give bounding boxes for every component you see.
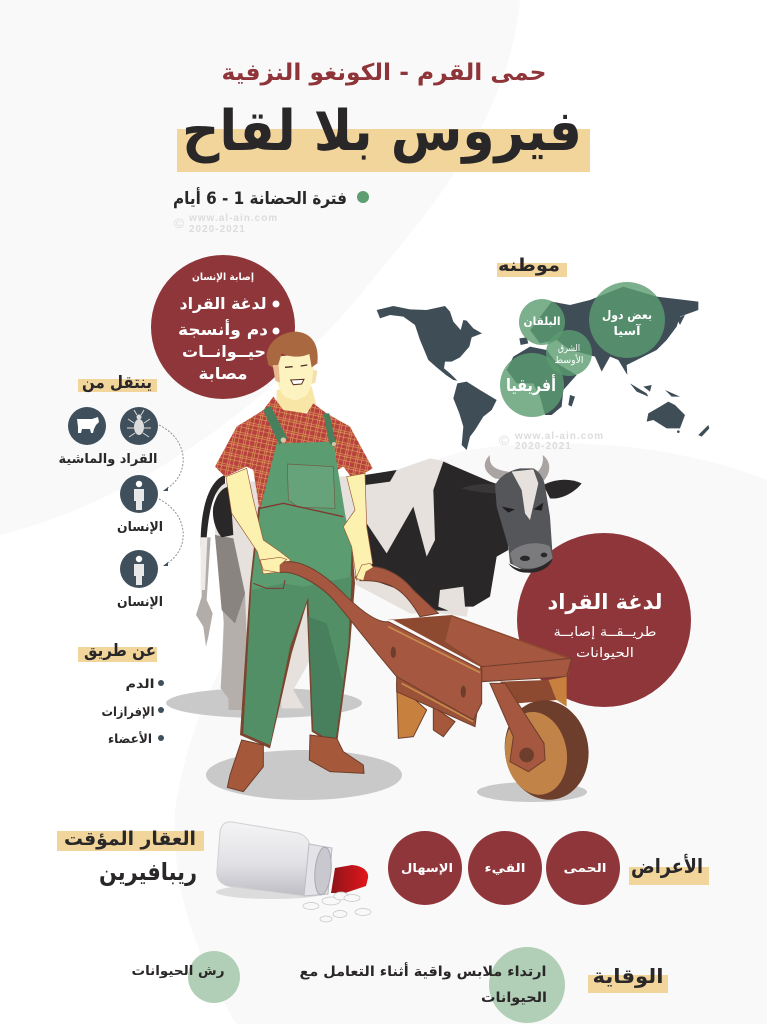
icon: cow [68, 407, 106, 445]
heading: temporary drug: العقار المؤقت [64, 828, 196, 850]
list: routes: الدم [126, 676, 154, 692]
prevention text: clothing: ارتداء ملابس واقية أثناء التعامل مع [300, 962, 546, 980]
circle: Middle East: الأوسط [554, 354, 584, 366]
heading: symptoms: الأعراض [631, 853, 703, 878]
shadows under cow, farmer and wheel [166, 688, 587, 802]
heading: through: عن طريق [84, 641, 156, 661]
circle: Middle East [546, 330, 592, 376]
circle: Asia: آسيا [614, 323, 641, 338]
boots [227, 735, 364, 792]
prevention text: spraying: رش الحيوانات [132, 964, 224, 979]
subtitle: حمى القرم - الكونغو النزفية [222, 60, 546, 86]
label: human 2: الإنسان [117, 595, 163, 610]
prevention bubble: clothing [489, 947, 565, 1023]
symptom: vomiting [468, 831, 542, 905]
callout: tick bite: الحيوانات [576, 646, 634, 661]
watermark top: © [174, 215, 185, 231]
wheelbarrow [260, 557, 596, 806]
arrow: human to human [159, 499, 183, 566]
prevention bubble: spraying [188, 951, 240, 1003]
callout: human infection: دم وأنسجة [178, 319, 268, 339]
symptom: fever: الحمى [564, 861, 606, 875]
callout: human infection: إصابة الإنسان [192, 272, 254, 283]
icon: human 2 [120, 550, 158, 588]
watermark top: www.al-ain.com [188, 213, 278, 224]
callout: human infection: حيــوانــات [182, 342, 266, 361]
circle: Africa [500, 353, 564, 417]
circle: Balkans: البلقان [524, 315, 560, 328]
cow [196, 455, 582, 710]
circle: Asia: بعض دول [602, 308, 652, 323]
incubation period: فترة الحضانة 1 - 6 أيام [173, 187, 347, 209]
symptom: diarrhea: الإسهال [401, 861, 453, 875]
watermark map: www.al-ain.com [514, 431, 604, 442]
icon: pill bottle [216, 822, 368, 899]
icon: pills [303, 892, 371, 922]
drug name: ريبافيرين [99, 858, 197, 886]
heading: prevention [588, 964, 668, 993]
list: routes: الأعضاء [108, 731, 152, 746]
trouser edge [240, 507, 355, 748]
prevention text: clothing: الحيوانات [481, 990, 547, 1006]
left arm [226, 468, 291, 574]
callout: human infection: مصابة [198, 364, 248, 383]
pocket [287, 464, 335, 508]
head [275, 353, 314, 401]
world map [377, 287, 709, 450]
callout: tick bite: لدغة القراد [548, 590, 662, 614]
overalls [243, 442, 352, 745]
symptom: diarrhea [388, 831, 462, 905]
list: routes [102, 676, 164, 746]
callout: human infection [151, 255, 295, 399]
title with highlight: فيروس بلا لقاح [182, 99, 582, 164]
circle: Africa: أفريقيا [506, 374, 556, 396]
callout: tick bite [517, 533, 691, 707]
watermark top: 2020-2021 [189, 224, 246, 235]
label: ticks and livestock: القراد والماشية [58, 452, 158, 467]
circle: Balkans [519, 299, 565, 345]
callout: human infection: لدغة القراد [180, 294, 266, 313]
icon: human 1 [120, 475, 158, 513]
watermark map [499, 431, 604, 452]
list: routes: الإفرازات [102, 704, 154, 719]
watermark top [174, 213, 278, 235]
icon: tick [120, 407, 158, 445]
straps [263, 406, 287, 445]
heading: transmitted from: ينتقل من [82, 373, 152, 393]
arrow: tick to human [159, 425, 183, 491]
watermark map: © [499, 432, 510, 448]
symptom: fever [546, 831, 620, 905]
right arm [343, 473, 373, 580]
callout: tick bite: طريــقــة إصابــة [554, 625, 656, 640]
symptom: vomiting: القيء [484, 861, 526, 875]
shirt [215, 397, 373, 513]
circle: Asia [589, 282, 665, 358]
heading: prevention: الوقاية [592, 964, 664, 988]
circle: Middle East: الشرق [558, 343, 580, 354]
label: human 1: الإنسان [117, 520, 163, 535]
neck and collar [277, 387, 317, 418]
watermark map: 2020-2021 [515, 441, 572, 452]
farmer [215, 332, 373, 748]
prevention text: clothing [300, 962, 547, 1006]
heading: homeland: موطنه [498, 255, 560, 276]
